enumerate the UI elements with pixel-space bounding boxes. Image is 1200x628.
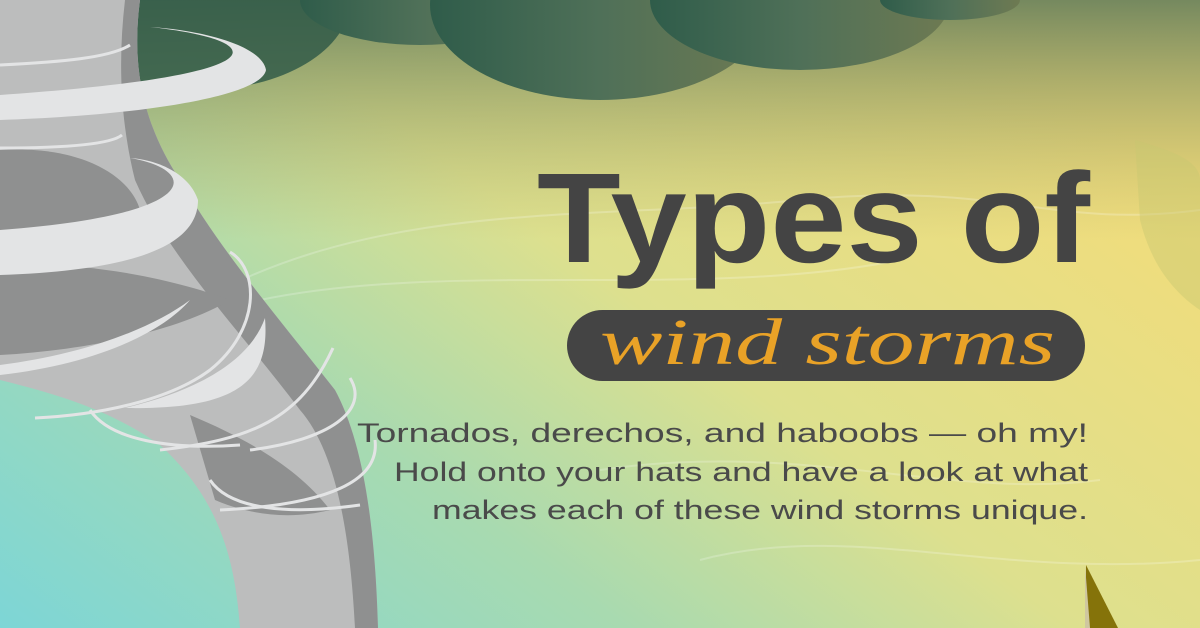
title: Types of: Types of [537, 147, 1090, 290]
intro paragraph: makes each of these wind storms unique. [432, 495, 1088, 525]
intro paragraph: Tornados, derechos, and haboobs — oh my! [357, 418, 1088, 448]
cloud [50, 0, 1020, 100]
intro paragraph [357, 418, 1089, 525]
leaf shape right [1135, 140, 1200, 310]
decorative wind lines [220, 195, 1200, 564]
tornado [0, 0, 378, 628]
intro paragraph: Hold onto your hats and have a look at what [394, 457, 1089, 487]
pill: wind storms: wind storms [600, 306, 1055, 379]
pill: wind storms [567, 306, 1085, 381]
sail icon bottom right [1085, 565, 1118, 628]
